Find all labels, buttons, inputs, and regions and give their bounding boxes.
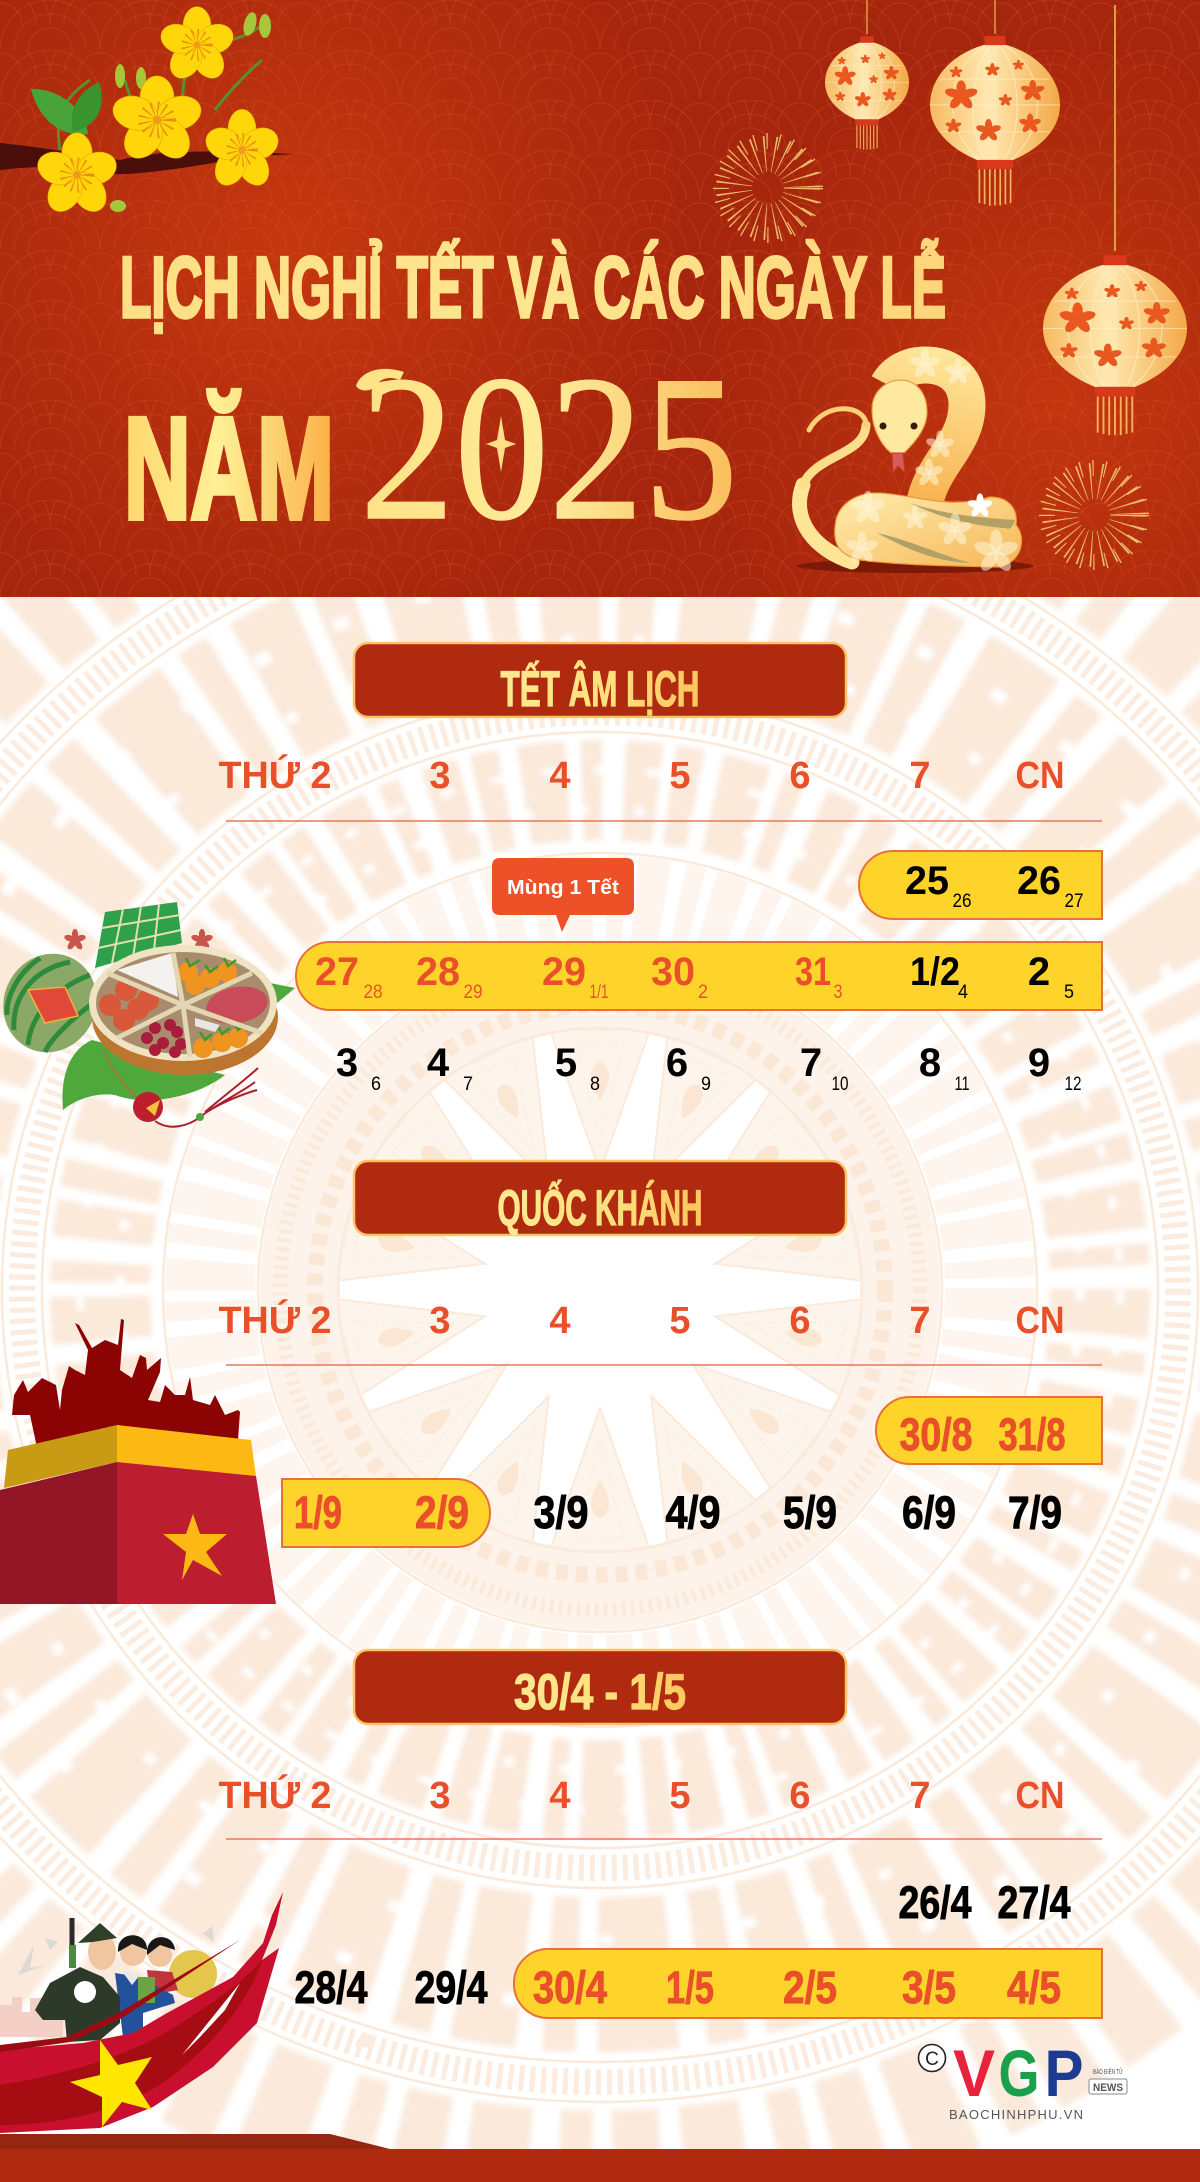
icon: lantern medium [930,0,1060,205]
calendar dates: 10 [832,1074,848,1095]
calendar dates: 27/4 [998,1877,1070,1928]
calendar dates: 11 [954,1074,970,1095]
calendar dates: 30/8 [900,1409,972,1460]
section: 30/4 - 1/5 [0,1650,1127,2133]
calendar dates: 29 [542,950,586,994]
calendar dates: 2 [1028,950,1050,994]
calendar dates: 1/9 [294,1487,342,1538]
calendar dates: 2 [698,982,708,1003]
calendar dates: 7/9 [1008,1487,1062,1538]
calendar dates: 7 [463,1074,473,1095]
weekday header: 4 [549,1775,571,1817]
weekday header: THỨ 2 [218,1773,332,1817]
calendar dates: 26 [952,891,972,912]
section: Quốc khánh [0,1161,1102,1604]
calendar dates: 25 [905,859,949,903]
logo: VGP: BAOCHINHPHU.VN [949,2107,1083,2122]
calendar dates: 12 [1064,1074,1082,1095]
banner: Quốc khánh: QUỐC KHÁNH [498,1179,702,1236]
calendar dates [294,1409,1066,1538]
section: Tết Âm lịch [0,643,1102,1127]
weekday header: THỨ 2 [218,1298,332,1342]
calendar dates: 5 [1064,982,1074,1003]
holiday bar: 30/4-4/5 [514,1949,1102,2018]
logo: VGP: G [998,2036,1040,2110]
title word: NĂM: NĂM [124,388,334,549]
weekday header: 7 [909,1775,931,1817]
calendar dates: 7 [800,1041,822,1085]
icon: lantern small [825,0,909,150]
logo: VGP: C [925,2049,939,2070]
weekday header [218,1298,1102,1365]
calendar dates: 8 [919,1041,941,1085]
calendar dates: 5 [555,1041,577,1085]
calendar dates: 3 [834,982,842,1003]
calendar dates: 26/4 [898,1877,972,1928]
holiday bar: 25-26 [859,851,1102,919]
icon: firework top [721,141,815,235]
weekday header: 6 [789,1775,811,1817]
calendar dates: 31/8 [998,1409,1066,1460]
calendar dates [294,1877,1070,2013]
calendar dates: 28 [364,982,382,1003]
calendar dates: 31 [795,950,831,994]
weekday header: 7 [909,755,931,797]
logo: VGP: P [1044,2036,1084,2110]
calendar dates: 9 [701,1074,711,1095]
calendar dates [315,859,1084,1095]
calendar dates: 28 [416,950,460,994]
icon: firework bottom [1047,468,1141,562]
title year: 2025: 2025 [360,333,738,563]
callout: Mùng 1 Tết: Mùng 1 Tết [507,877,619,899]
calendar dates: 4 [958,982,968,1003]
logo: VGP [918,2036,1127,2122]
weekday header: 7 [909,1300,931,1342]
calendar dates: 3/5 [902,1962,956,2013]
weekday header: 5 [669,1300,691,1342]
calendar dates: 4 [427,1041,450,1085]
calendar dates: 1/1 [590,982,608,1003]
banner: 30/4 - 1/5: 30/4 - 1/5 [514,1664,686,1720]
icon: lantern large [1043,5,1187,435]
calendar dates: 4/5 [1007,1962,1061,2013]
calendar dates: 6/9 [902,1487,956,1538]
calendar dates: 29 [464,982,482,1003]
weekday header: 5 [669,1775,691,1817]
weekday header: CN [1016,755,1064,797]
calendar dates: 3 [336,1041,358,1085]
calendar dates: 9 [1028,1041,1050,1085]
weekday header: THỨ 2 [218,753,332,797]
icon: golden snake [797,349,1033,574]
calendar dates: 29/4 [414,1962,488,2013]
calendar dates: 6 [371,1074,381,1095]
weekday header: CN [1016,1300,1064,1342]
icon: crowd on monument [0,1319,276,1604]
calendar dates: 8 [590,1074,600,1095]
calendar dates: 6 [666,1041,688,1085]
calendar dates: 30/4 [533,1962,607,2013]
weekday header: 4 [549,1300,571,1342]
banner: Quốc khánh [354,1161,846,1236]
icon: Tet food tray [0,902,295,1127]
banner: Tết Âm lịch [354,643,846,717]
calendar dates: 2/5 [783,1962,837,2013]
weekday header [218,753,1102,821]
holiday bar: 1/9-2/9 [282,1479,490,1547]
weekday header: 5 [669,755,691,797]
weekday header: 3 [429,755,451,797]
calendar dates: 28/4 [294,1962,368,2013]
banner: Tết Âm lịch: TẾT ÂM LỊCH [500,661,700,717]
calendar dates: 1/2 [910,950,960,994]
icon: people and flag ribbon [0,1892,283,2133]
logo: VGP: NEWS [1093,2082,1123,2094]
weekday header: 6 [789,755,811,797]
calendar dates: 2/9 [415,1487,469,1538]
calendar dates: 30 [651,950,695,994]
weekday header [218,1773,1102,1839]
weekday header: 4 [549,755,571,797]
calendar dates: 4/9 [666,1487,720,1538]
calendar dates: 27 [315,950,359,994]
weekday header: 3 [429,1775,451,1817]
banner: 30/4 - 1/5 [354,1650,846,1724]
weekday header: 6 [789,1300,811,1342]
logo: VGP: V [953,2036,995,2110]
icon: apricot blossom branch [0,7,295,218]
holiday bar: 30/8-31/8 [876,1397,1102,1464]
panel: header [0,0,1200,597]
calendar dates: 1/5 [666,1962,714,2013]
callout: Mùng 1 Tết [492,858,634,932]
logo: VGP: BÁO ĐIỆN TỬ [1093,2067,1123,2076]
weekday header: 3 [429,1300,451,1342]
calendar dates: 26 [1017,859,1061,903]
calendar dates: 3/9 [534,1487,588,1538]
footer band [0,2134,1200,2182]
holiday bar: 27-2 [296,942,1102,1010]
calendar dates: 5/9 [783,1487,837,1538]
calendar dates: 27 [1064,891,1084,912]
weekday header: CN [1016,1775,1064,1817]
